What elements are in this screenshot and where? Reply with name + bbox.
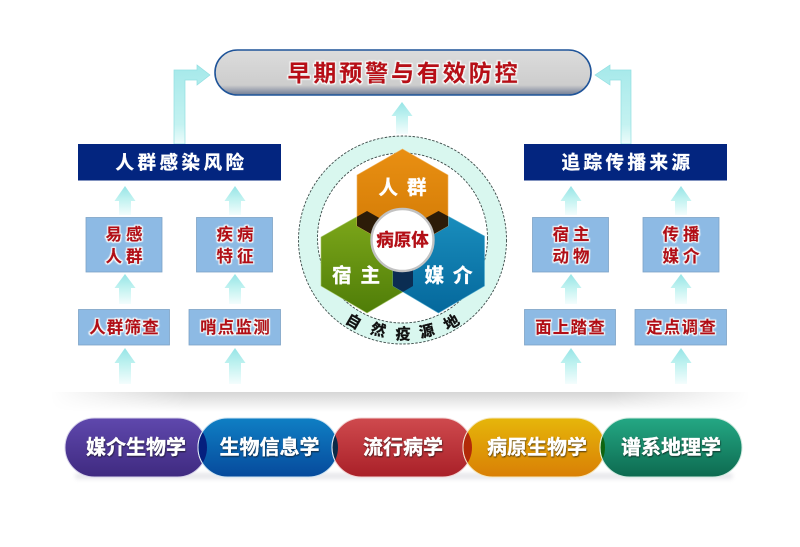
ring label: 自然疫源地: 疫 [395,325,411,343]
overlap: red and yellow [462,432,472,464]
box: 哨点监测: 哨点监测 [200,318,271,337]
title pill [215,50,591,95]
arrows: lower row [114,348,692,384]
overlap: yellow and green [600,435,605,460]
arrow: centre up to title [392,102,412,134]
ring label: 自然疫源地 [342,310,463,343]
centre circle: pathogen [372,209,434,271]
pill: 流行病学 [332,418,472,477]
box: 宿主动物: 动物 [552,247,594,266]
pill: 流行病学: 流行病学 [363,436,443,459]
box: 面上踏查 [524,310,616,345]
label: 媒介: 媒介 [424,265,482,287]
ring label: 自然疫源地: 然 [369,320,388,341]
box: 面上踏查: 面上踏查 [535,318,606,337]
label: 宿主: 宿主 [332,264,389,287]
ring label: 自然疫源地: 自 [342,310,365,333]
overlap: host and vector [393,270,413,292]
infographic canvas [64,49,742,480]
centre diagram: natural focus [298,136,506,344]
ring label: 自然疫源地: 地 [441,312,463,334]
overlap: blue and red [332,434,338,461]
hexagon: vector [393,211,484,313]
pill: 病原生物学 [463,418,605,477]
pill: 谱系地理学: 谱系地理学 [621,436,721,459]
arrows: upper row [114,186,692,215]
box: 定点调查: 定点调查 [646,317,717,337]
box: 人群筛查 [78,310,170,345]
discipline pills [65,418,742,479]
hexagon: host [321,211,413,313]
pill: 病原生物学: 病原生物学 [487,436,587,459]
ring inner area [318,153,488,323]
label: 人群: 人群 [378,177,436,199]
box: 宿主动物: 宿主 [552,224,594,244]
panel: right header [524,144,727,180]
overlap: population and host [357,211,380,234]
box: 易感人群 [86,218,162,272]
box: 宿主动物 [532,218,608,272]
overlap: population and vector [426,211,448,234]
shadow band above disciplines [79,392,720,408]
pill: 生物信息学 [198,418,338,477]
pill: 媒介生物学 [65,418,207,477]
panel: right header: 追踪传播来源 [561,152,694,173]
panel: left header [78,144,281,180]
box: 疾病特征: 特征 [216,247,258,266]
pill: 谱系地理学 [600,418,742,477]
box: 传播媒介: 传播 [662,225,704,244]
box: 传播媒介: 媒介 [662,247,704,266]
overlap: purple and blue [198,432,207,464]
box: 传播媒介 [643,218,719,272]
box: 定点调查 [635,310,726,345]
box: 易感人群: 易感 [106,224,146,244]
hexagon: population [357,149,448,252]
arrow: right elbow to title [595,65,631,144]
box: 疾病特征: 疾病 [216,224,258,244]
ring: natural focus [298,136,506,344]
pill: 生物信息学: 生物信息学 [220,435,320,459]
pill shadow [75,473,733,479]
panel: left header: 人群感染风险 [115,152,248,173]
pill: 媒介生物学: 媒介生物学 [86,436,186,459]
ring label: 自然疫源地: 源 [418,322,436,342]
arrows: middle row [114,274,692,304]
box: 哨点监测 [189,310,280,345]
title pill: 早期预警与有效防控 [287,60,521,86]
centre circle: pathogen: 病原体 [376,230,429,250]
box: 疾病特征 [196,218,272,272]
arrow: left elbow to title [174,65,210,144]
box: 易感人群: 人群 [106,247,146,266]
box: 人群筛查: 人群筛查 [89,317,160,337]
